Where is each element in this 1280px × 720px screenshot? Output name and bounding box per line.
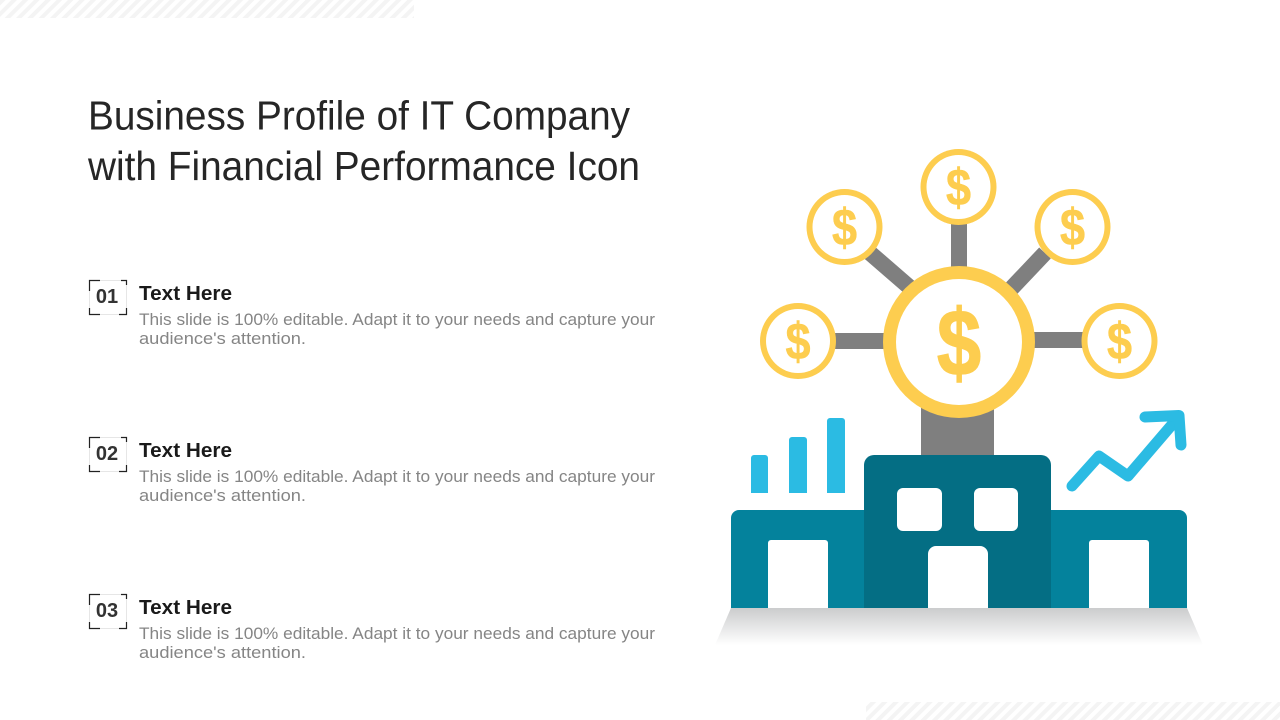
number badge 01: 01 bbox=[96, 286, 118, 308]
central coin: $ bbox=[937, 290, 981, 395]
coin left bbox=[760, 303, 836, 379]
list item 02 bbox=[90, 438, 655, 505]
description 02: This slide is 100% editable. Adapt it to your needs and capture your bbox=[139, 467, 655, 486]
arrow: growth bbox=[1072, 416, 1181, 486]
connectors bbox=[830, 220, 1090, 341]
list item 01 bbox=[90, 280, 655, 348]
description 03 bbox=[139, 624, 655, 662]
title: with Financial Performance Icon bbox=[87, 143, 640, 189]
heading 01: Text Here bbox=[139, 283, 232, 305]
left building bbox=[731, 510, 864, 608]
number badge 03: 03 bbox=[96, 600, 118, 622]
title bbox=[87, 92, 640, 189]
description 03: This slide is 100% editable. Adapt it to your needs and capture your bbox=[139, 624, 655, 643]
description 01: audience's attention. bbox=[139, 329, 306, 348]
description 01 bbox=[139, 310, 655, 348]
number badge 02: 02 bbox=[96, 443, 118, 465]
coin right bbox=[1082, 303, 1158, 379]
trunk bbox=[921, 400, 994, 460]
coin right: $ bbox=[1107, 313, 1132, 371]
description 03: audience's attention. bbox=[139, 643, 306, 662]
heading 03: Text Here bbox=[139, 597, 232, 619]
coin top bbox=[920, 149, 996, 225]
centre building bbox=[864, 455, 1051, 608]
title: Business Profile of IT Company bbox=[88, 92, 630, 138]
bar chart bbox=[751, 418, 845, 493]
heading 02: Text Here bbox=[139, 440, 232, 462]
coin upper right bbox=[1034, 189, 1110, 265]
coin left: $ bbox=[786, 313, 811, 371]
central coin bbox=[883, 266, 1035, 418]
icon: company building with financial performance bbox=[715, 149, 1203, 645]
coin upper left bbox=[806, 189, 882, 265]
ground shadow bbox=[715, 608, 1203, 645]
coin upper right: $ bbox=[1060, 199, 1085, 257]
number badge 03 bbox=[90, 594, 126, 628]
number badge 01 bbox=[90, 280, 126, 314]
description 01: This slide is 100% editable. Adapt it to your needs and capture your bbox=[139, 310, 655, 329]
number badge 02 bbox=[90, 438, 126, 472]
coin upper left: $ bbox=[832, 199, 857, 257]
list item 03 bbox=[90, 594, 655, 662]
right building bbox=[1051, 510, 1187, 608]
description 02: audience's attention. bbox=[139, 486, 306, 505]
description 02 bbox=[139, 467, 655, 505]
coin top: $ bbox=[946, 159, 971, 217]
